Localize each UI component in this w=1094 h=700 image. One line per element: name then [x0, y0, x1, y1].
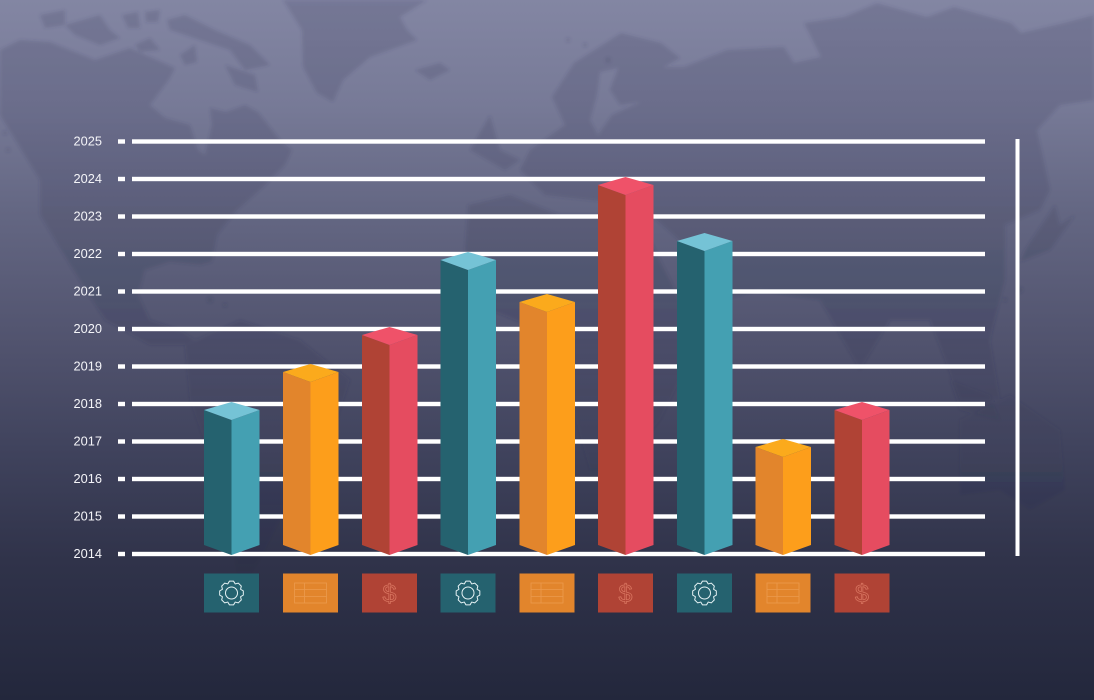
year labels [74, 134, 102, 561]
y axis years and gridlines [74, 134, 985, 561]
year labels: 2022 [74, 246, 102, 261]
year labels: 2018 [74, 396, 102, 411]
bar 3 red [362, 327, 418, 555]
icon tile: table 1 [283, 574, 338, 612]
icon tile: dollar 3 [834, 574, 890, 612]
year labels: 2024 [74, 171, 102, 186]
bar 7 teal [677, 233, 732, 555]
year labels: 2016 [74, 471, 102, 486]
year labels: 2017 [74, 434, 102, 448]
icon tile: dollar 2: $ [619, 580, 633, 608]
bar 4 teal [440, 252, 496, 555]
year labels: 2014 [74, 546, 102, 561]
year labels: 2020 [74, 321, 102, 336]
year labels: 2025 [74, 134, 102, 148]
icon tile: dollar 2 [598, 574, 653, 612]
bar 1 teal [204, 402, 260, 555]
year labels: 2019 [74, 358, 102, 374]
bar 8 orange [756, 439, 811, 555]
icon tile: table 2 [520, 574, 574, 612]
year labels: 2021 [74, 284, 102, 298]
bar 9 red [834, 402, 890, 555]
year labels: 2015 [74, 508, 102, 524]
icon tile: gear 2 [440, 574, 496, 612]
year labels: 2023 [74, 208, 102, 224]
right vertical line [1016, 139, 1020, 556]
icon tile: dollar 1: $ [383, 580, 397, 608]
bar 6 red [598, 177, 654, 555]
icon tile: dollar 3: $ [855, 580, 869, 608]
icon tile: table 3 [756, 574, 810, 612]
icon tile: gear 3 [677, 574, 732, 612]
icon tile: dollar 1 [362, 574, 417, 612]
bar 2 orange [283, 364, 338, 555]
icon tile: gear 1 [204, 574, 259, 612]
bar 5 orange [520, 294, 575, 555]
